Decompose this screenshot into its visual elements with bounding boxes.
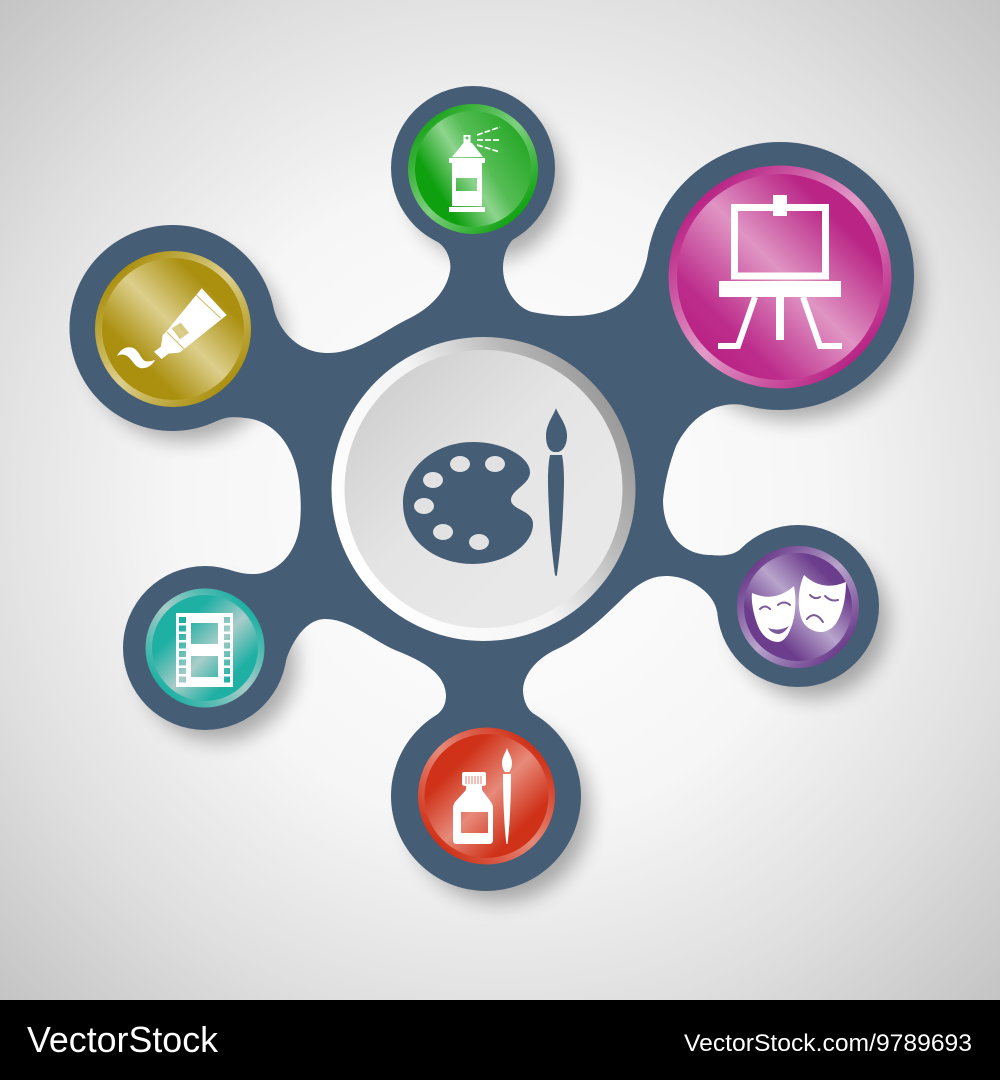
icon: spray can xyxy=(449,127,501,212)
icon: easel xyxy=(718,195,842,346)
icon: palette xyxy=(403,442,533,564)
icon: ink bottle xyxy=(453,772,493,844)
center circle xyxy=(332,337,636,641)
icon: theatre masks xyxy=(752,575,846,642)
connector shape xyxy=(70,86,914,891)
footer url text: VectorStock.com/9789693 xyxy=(684,1030,972,1057)
drop shadow of connector shape xyxy=(88,105,922,902)
footer logo text: VectorStock xyxy=(27,1019,219,1060)
icon: small brush xyxy=(502,748,512,844)
button: theatre masks xyxy=(737,546,859,668)
icon: paint tube xyxy=(117,288,227,368)
button: film strip xyxy=(146,588,264,708)
button: ink bottle and brush xyxy=(418,728,555,864)
icon: film strip xyxy=(176,613,233,687)
footer bar xyxy=(0,1000,1000,1080)
button: paint tube xyxy=(95,251,251,407)
button: spray can xyxy=(408,104,538,234)
icon: paint brush xyxy=(546,408,567,576)
button: easel xyxy=(668,166,892,388)
